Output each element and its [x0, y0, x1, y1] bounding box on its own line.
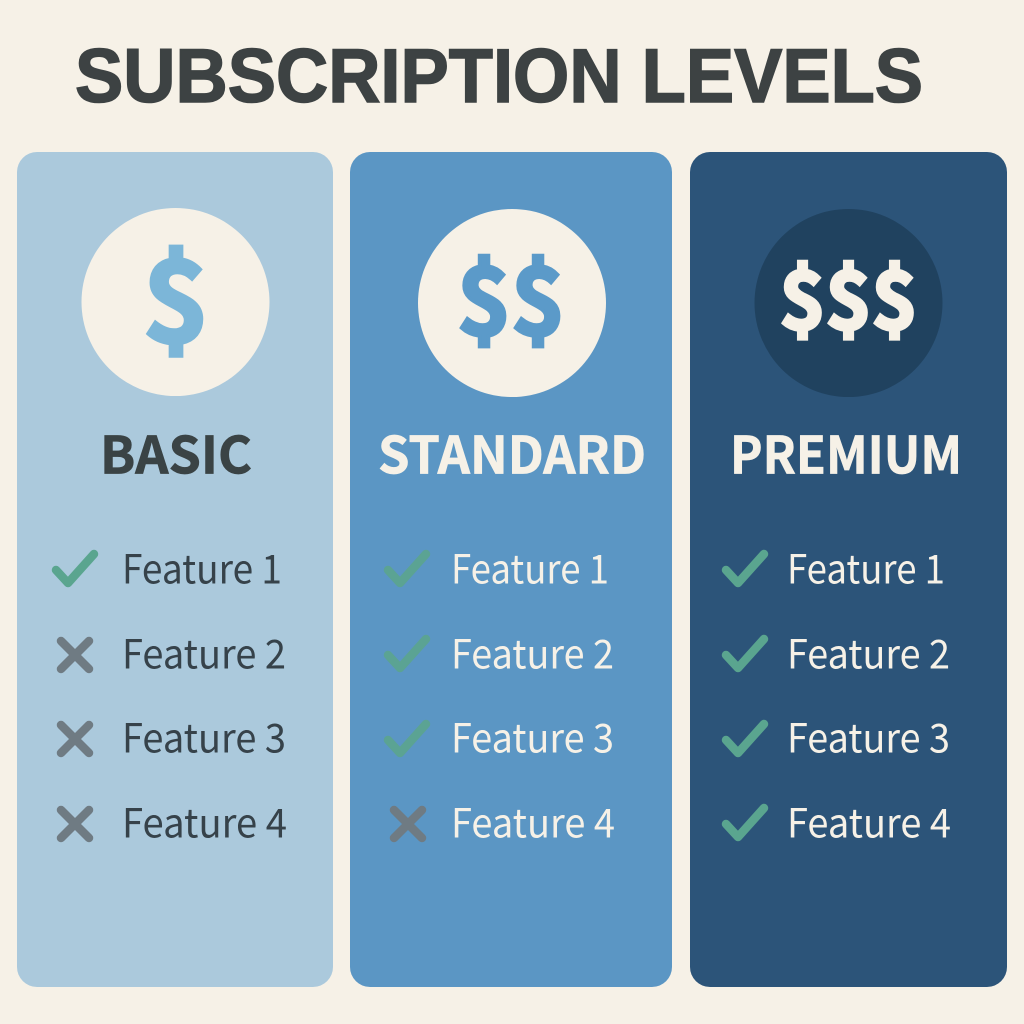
feature row: premium 1 included: Feature 1 — [787, 538, 945, 596]
icon: triple dollar: $$$ — [780, 237, 918, 353]
panel: standard — [350, 152, 672, 987]
heading: premium: PREMIUM — [730, 414, 962, 488]
feature row: premium 3 included: Feature 3 — [787, 706, 950, 764]
icon: double dollar — [418, 209, 606, 397]
feature row: premium 2 included — [726, 622, 950, 680]
icon: single dollar: $ — [143, 211, 209, 375]
feature row: standard 2 included: Feature 2 — [451, 622, 614, 680]
icon: double dollar: $$ — [457, 227, 565, 363]
feature list: standard — [388, 538, 615, 850]
heading: standard: STANDARD — [378, 414, 646, 488]
feature row: premium 4 included: Feature 4 — [787, 792, 951, 850]
feature row: basic 1 included — [56, 538, 282, 596]
panel: premium — [690, 152, 1007, 987]
feature list: premium — [726, 538, 951, 850]
feature row: basic 1 included: Feature 1 — [122, 538, 282, 596]
heading: basic: BASIC — [100, 414, 252, 488]
panel: basic — [17, 152, 333, 987]
feature row: basic 3 excluded: Feature 3 — [122, 706, 286, 764]
feature row: basic 4 excluded: Feature 4 — [122, 792, 287, 850]
icon: triple dollar — [754, 209, 942, 397]
icon: single dollar — [82, 208, 270, 396]
feature row: standard 4 excluded: Feature 4 — [451, 792, 615, 850]
feature list: basic — [56, 538, 287, 850]
feature row: standard 1 included: Feature 1 — [451, 538, 609, 596]
feature row: premium 2 included: Feature 2 — [787, 622, 950, 680]
feature row: premium 3 included — [726, 706, 950, 764]
feature row: standard 1 included — [388, 538, 609, 596]
feature row: basic 2 excluded: Feature 2 — [122, 622, 286, 680]
feature row: standard 3 included: Feature 3 — [451, 706, 614, 764]
feature row: standard 3 included — [388, 706, 614, 764]
feature row: standard 2 included — [388, 622, 614, 680]
feature row: premium 1 included — [726, 538, 945, 596]
title: SUBSCRIPTION LEVELS — [75, 34, 923, 119]
